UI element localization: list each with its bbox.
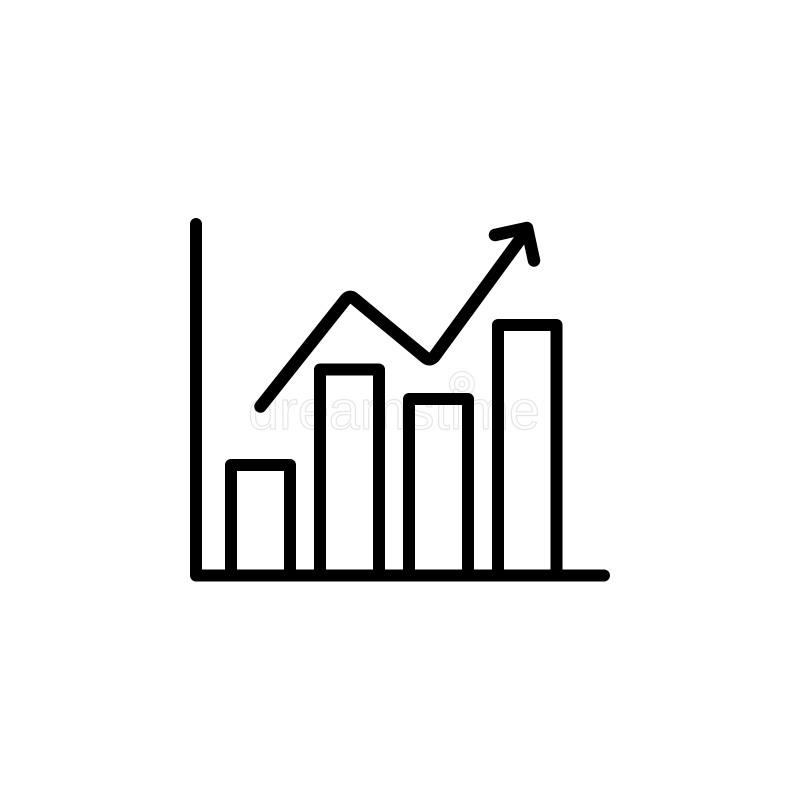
bar 1 (231, 465, 290, 576)
trend line arrow (260, 228, 534, 406)
chart axes (196, 224, 604, 576)
bar 2 (320, 370, 379, 576)
watermark: dreamstime (248, 379, 540, 441)
bar 4 (498, 325, 556, 576)
bar 3 (409, 399, 468, 576)
